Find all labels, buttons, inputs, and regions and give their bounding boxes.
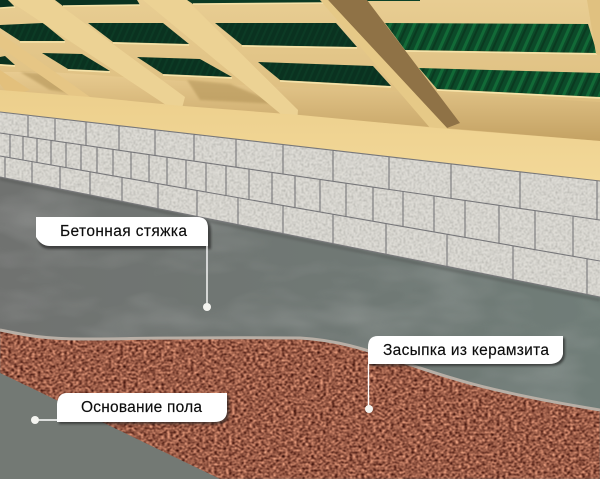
label box (36, 217, 208, 246)
roof structure (0, 0, 600, 150)
block wall (0, 112, 600, 297)
leader line (35, 419, 57, 421)
roofing panels, top row (0, 0, 420, 8)
callout: floor base (31, 393, 229, 424)
floor (0, 175, 600, 479)
leader dot (203, 303, 211, 311)
label text: Бетонная стяжка (60, 223, 187, 240)
label text: Основание пола (81, 399, 202, 416)
leader dot (365, 405, 373, 413)
label shadow (59, 395, 229, 424)
shaded lower sheathing (0, 72, 600, 141)
wall bottom shadow (0, 179, 600, 300)
wooden beam (0, 90, 600, 181)
screed edge (0, 330, 600, 410)
concrete screed (0, 175, 600, 479)
leader line (368, 364, 370, 408)
rafter two (143, 0, 298, 123)
mortar joints (0, 112, 600, 297)
leader line (206, 246, 208, 306)
label text: Засыпка из керамзита (383, 342, 549, 359)
wall blocks (0, 112, 600, 297)
label box (57, 393, 227, 422)
leader dot (31, 416, 39, 424)
rafter one (8, 0, 185, 112)
right edge rafter (587, 0, 600, 55)
lit batten edges (0, 3, 600, 98)
rafter three, shaded face (328, 0, 460, 128)
callout: screed (36, 217, 211, 311)
small corner rafter (0, 70, 30, 96)
label shadow (370, 338, 565, 366)
expanded clay backfill (0, 330, 600, 479)
wood sheathing background (0, 0, 600, 150)
rafter shadows (20, 72, 278, 104)
rafter three, lit side (320, 0, 447, 137)
roofing panels, middle row (0, 23, 597, 53)
label shadow (38, 219, 211, 249)
callout: expanded clay (365, 336, 565, 413)
roofing panels, lower row (0, 53, 600, 97)
label box (368, 336, 563, 364)
floor base (0, 373, 220, 479)
lower left rafter (0, 33, 90, 103)
